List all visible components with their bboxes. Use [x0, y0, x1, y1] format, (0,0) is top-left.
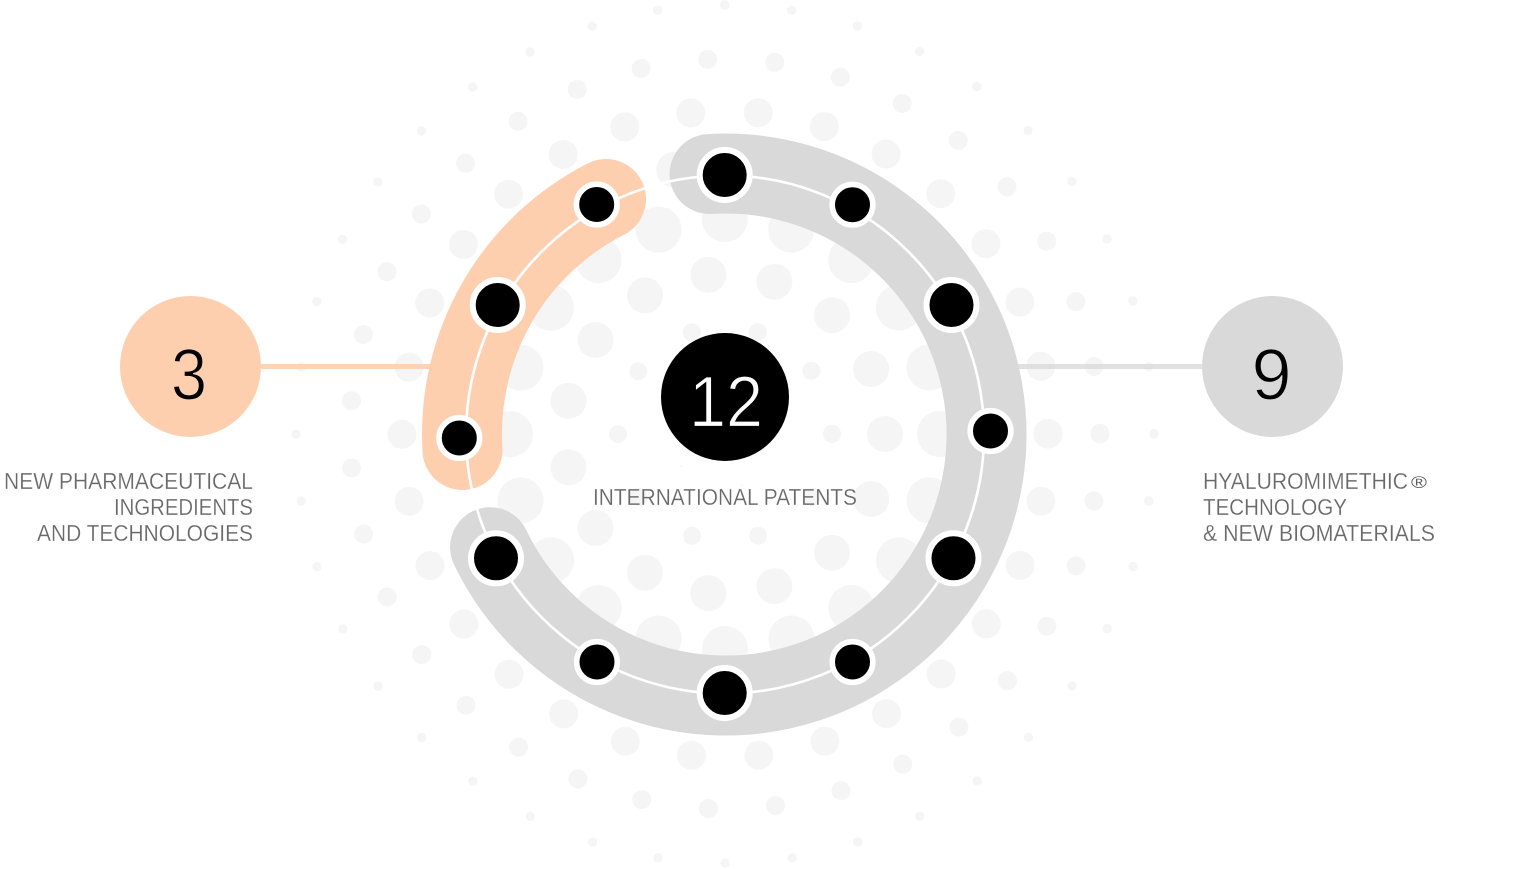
patent nodes on the ring: [439, 150, 1011, 718]
node 5: [928, 533, 978, 583]
center badge: 12: [661, 333, 789, 461]
right label: HYALUROMIMETHIC: [1203, 468, 1408, 494]
center label: INTERNATIONAL PATENTS: [593, 484, 857, 510]
left label: NEW PHARMACEUTICAL: [4, 468, 253, 494]
right badge: 9: 9: [1251, 336, 1292, 416]
left label: AND TECHNOLOGIES: [37, 520, 253, 546]
node 3: [926, 280, 976, 330]
node 2: [832, 184, 873, 225]
left label: [4, 468, 253, 546]
right label: [1203, 468, 1435, 546]
node 4: [970, 411, 1011, 451]
node 11: [473, 280, 523, 330]
background dot pattern: [296, 5, 1154, 863]
thin white ring line: [466, 176, 984, 694]
left badge: 3: 3: [171, 336, 207, 416]
node 8: [577, 642, 617, 682]
left badge: 3: [120, 296, 261, 437]
ring segment: grey, 9 patents: [490, 174, 987, 696]
node 6: [832, 642, 873, 682]
left label: INGREDIENTS: [114, 494, 253, 520]
node 1: [700, 150, 750, 200]
node 12: [576, 184, 617, 225]
center badge: 12: 12: [689, 362, 763, 442]
right label: ®: [1411, 473, 1428, 492]
node 9: [471, 533, 521, 583]
node 10: [439, 418, 480, 458]
right label: TECHNOLOGY: [1203, 494, 1347, 520]
connector line: right: [1018, 364, 1208, 369]
ring segment: peach, 3 patents: [462, 199, 606, 450]
right label: & NEW BIOMATERIALS: [1203, 520, 1435, 546]
connector line: left: [255, 364, 433, 369]
right badge: 9: [1202, 296, 1343, 437]
node 7: [700, 668, 750, 718]
